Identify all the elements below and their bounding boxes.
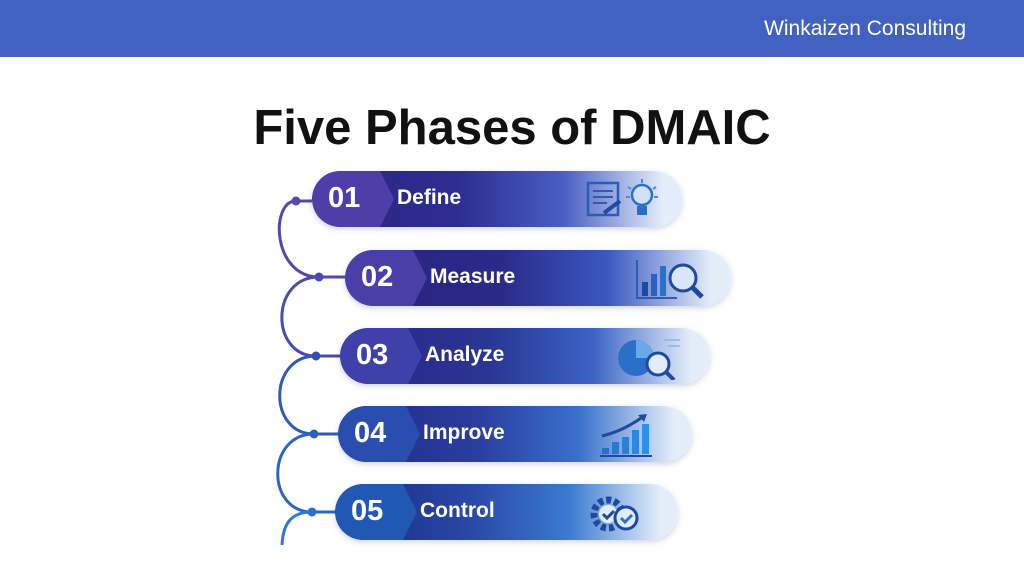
phase 01 Define: 01 xyxy=(328,182,360,214)
brand name: Winkaizen Consulting xyxy=(764,17,966,40)
header bar xyxy=(0,0,1024,57)
phase 05 Control xyxy=(335,484,678,540)
icon: bar chart with magnifier xyxy=(636,260,704,299)
phase 02 Measure: Measure xyxy=(430,265,515,288)
phase 02 Measure: 02 xyxy=(361,261,393,293)
phase 05 Control: 05 xyxy=(351,495,383,527)
icon: gear with checkmarks xyxy=(590,496,638,532)
phase 03 Analyze: Analyze xyxy=(425,343,504,366)
icon: rising bars with arrow xyxy=(600,414,652,457)
phase 04 Improve xyxy=(338,406,692,462)
phase 01 Define: Define xyxy=(397,186,461,209)
phase 01 Define xyxy=(312,171,682,227)
phase 02 Measure xyxy=(345,250,731,306)
phase 05 Control: Control xyxy=(420,499,495,522)
phase 03 Analyze xyxy=(340,328,710,384)
phase 04 Improve: 04 xyxy=(354,417,386,449)
title: Five Phases of DMAIC xyxy=(253,101,771,155)
icon: document and bulb xyxy=(586,179,658,216)
phase 03 Analyze: 03 xyxy=(356,339,388,371)
icon: pie chart with magnifier xyxy=(618,339,680,380)
phase 04 Improve: Improve xyxy=(423,421,505,444)
